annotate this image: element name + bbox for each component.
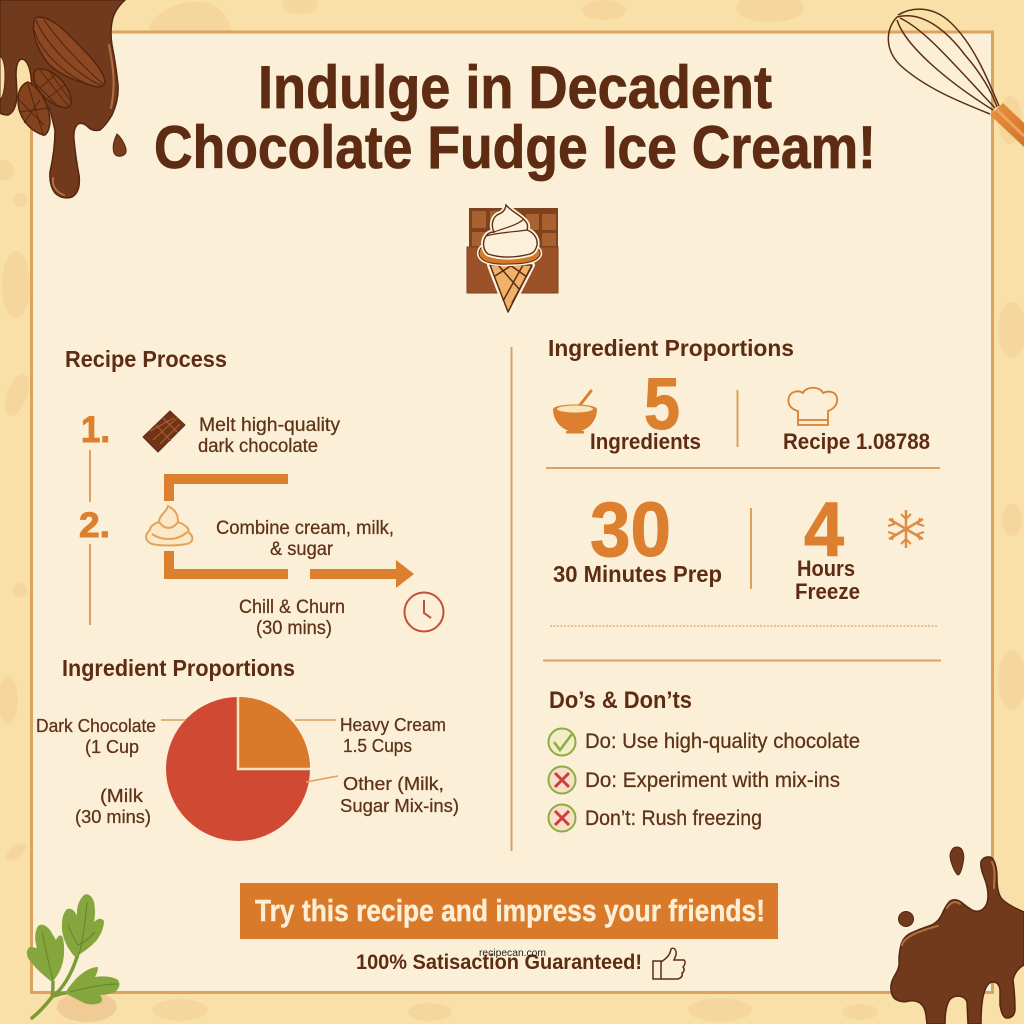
step number 1: 1. [81, 409, 110, 450]
icon: chocolate bar [143, 411, 185, 452]
label: milk: (Milk [100, 786, 144, 806]
icon: cocoa pod lower [18, 82, 50, 135]
icon: bowl [553, 391, 597, 434]
heading: ingredient proportions (right): Ingredient Proportions [548, 335, 794, 361]
stat: 4 hours [795, 487, 860, 604]
text: step 2: Combine cream, milk, [216, 518, 394, 539]
illustration: herb sprig [27, 894, 119, 1022]
text: do 2: Do: Experiment with mix-ins [585, 769, 840, 792]
icon: check [548, 728, 576, 756]
pie chart [36, 697, 459, 841]
panel: stats [546, 364, 940, 626]
label: heavy cream [340, 715, 446, 756]
title: Chocolate Fudge Ice Cream! [154, 114, 876, 181]
icon: cross [548, 766, 576, 794]
icon: ice cream cone on chocolate bar [467, 205, 558, 312]
watermark: recipecan.com [479, 948, 546, 959]
stat: 30 minutes: 30 [590, 487, 671, 573]
stat: 4 hours: Hours [797, 556, 855, 581]
icon: chef hat [788, 388, 837, 425]
label: dark chocolate: Dark Chocolate [36, 716, 156, 736]
text: step 3: Chill & Churn [239, 597, 345, 618]
text: step 2: & sugar [270, 539, 334, 560]
text: step 2 [216, 518, 394, 560]
illustration: whisk [888, 9, 1024, 147]
label: milk: (30 mins) [75, 807, 151, 827]
icon: clock [404, 592, 444, 632]
icon: cross [548, 804, 576, 832]
text: step 3: (30 mins) [256, 618, 332, 639]
icon: chocolate drop [113, 134, 126, 156]
icon: snowflake [888, 510, 924, 548]
heading: ingredient proportions (left): Ingredient Proportions [62, 655, 295, 681]
text: step 1 [198, 415, 341, 457]
label: milk [75, 786, 151, 827]
text: step 3 [239, 597, 345, 639]
label: other: Other (Milk, [343, 774, 444, 794]
title: Indulge in Decadent [258, 54, 772, 121]
column divider [510, 347, 512, 851]
text: don't: Don’t: Rush freezing [585, 807, 762, 830]
arrow [310, 560, 414, 588]
leader lines [161, 720, 338, 782]
label: dark chocolate [36, 716, 156, 757]
label: dark chocolate: (1 Cup [85, 737, 139, 757]
illustration: melting chocolate with cocoa beans [0, 0, 126, 198]
row divider [546, 467, 940, 469]
icon: cocoa pod upper [34, 69, 71, 108]
stat: 5 ingredients: 5 [644, 364, 680, 445]
stat: 5 ingredients: Ingredients [590, 429, 701, 454]
icon: whipped cream [146, 506, 192, 546]
icon: chocolate drop [950, 847, 964, 875]
icon: chocolate dot [898, 912, 914, 926]
illustration: chocolate splat [891, 847, 1024, 1024]
stat: recipe: Recipe 1.08788 [783, 429, 930, 454]
stat: 5 ingredients [590, 364, 701, 454]
panel: recipe process steps [79, 409, 444, 639]
icon: thumbs up [653, 948, 685, 979]
label: heavy cream: Heavy Cream [340, 715, 446, 735]
text: do 1: Do: Use high-quality chocolate [585, 730, 860, 753]
step number 2: 2. [79, 506, 110, 545]
heading: Do’s & Don’ts [549, 687, 692, 714]
icon: large cocoa bean [33, 17, 105, 87]
panel: do's and don'ts [548, 687, 860, 832]
stat: 30 minutes: 30 Minutes Prep [553, 561, 722, 587]
label: other: Sugar Mix-ins) [340, 796, 459, 816]
stat: 4 hours: 4 [804, 487, 844, 573]
call to action banner [240, 883, 778, 939]
guarantee line: 100% Satisaction Guaranteed! [356, 951, 642, 974]
text: step 1: Melt high-quality [199, 415, 341, 436]
title [154, 54, 876, 181]
label: heavy cream: 1.5 Cups [343, 736, 412, 756]
bracket connector [169, 479, 288, 574]
section divider [543, 660, 941, 662]
step timeline [89, 450, 91, 625]
call to action banner: Try this recipe and impress your friends! [255, 893, 765, 928]
text: step 1: dark chocolate [198, 436, 318, 457]
label: other [340, 774, 459, 816]
stat: 4 hours: Freeze [795, 579, 860, 604]
heading: recipe process: Recipe Process [65, 346, 227, 372]
stat: 30 minutes [553, 487, 722, 587]
